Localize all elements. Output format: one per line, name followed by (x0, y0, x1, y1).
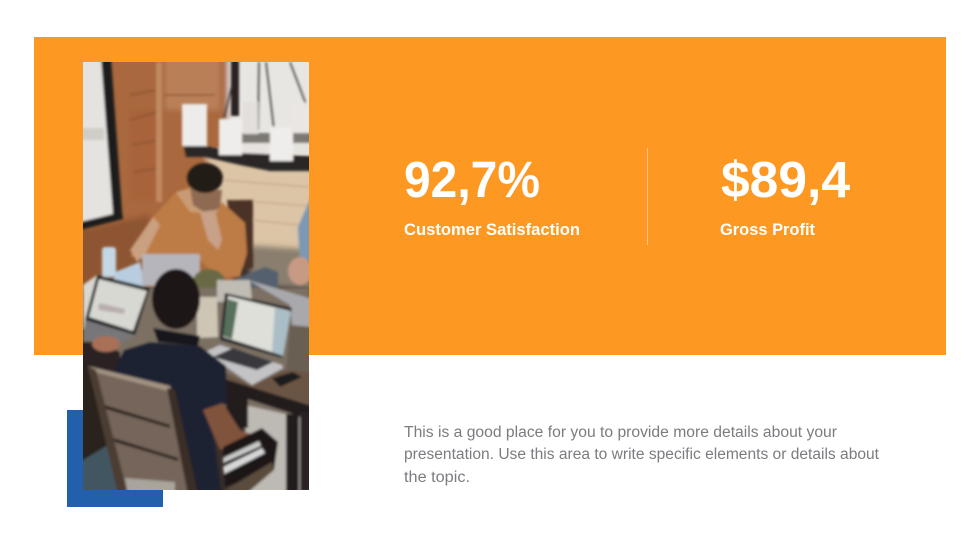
table and laptops behind (112, 262, 145, 290)
value $89,4: $89,4 (721, 151, 851, 208)
description text block: the topic. (404, 469, 470, 486)
phone (272, 372, 302, 387)
value 92,7%: 92,7% (404, 151, 540, 208)
floor (245, 405, 312, 495)
wood grooves (130, 90, 215, 172)
metric: customer satisfaction (404, 151, 580, 239)
shorts (223, 428, 278, 487)
description text block (404, 424, 880, 486)
right laptop (220, 293, 292, 358)
chair behind man (227, 200, 253, 268)
water bottle (102, 247, 116, 277)
table top and edge (225, 370, 312, 406)
chandelier (222, 62, 309, 130)
label gross profit: Gross Profit (720, 221, 815, 239)
label customer satisfaction: Customer Satisfaction (404, 221, 580, 239)
log wall lines (222, 180, 309, 226)
photo: team working on laptops (83, 62, 309, 490)
man seen from behind (152, 269, 200, 329)
left side dark sleeve and floor (83, 341, 106, 460)
description text block: This is a good place for you to provide more details about your (404, 424, 837, 441)
wooden chair (96, 372, 189, 490)
metric: gross profit (720, 151, 851, 239)
window left (80, 58, 113, 222)
man in orange hoodie (130, 188, 247, 277)
orange banner panel (34, 37, 946, 355)
right person (296, 198, 309, 262)
left laptop (85, 275, 150, 335)
blue accent square (67, 410, 163, 507)
arm on lap (202, 401, 251, 452)
vertical divider (647, 148, 648, 245)
description text block: presentation. Use this area to write specific elements or details about (404, 446, 880, 463)
